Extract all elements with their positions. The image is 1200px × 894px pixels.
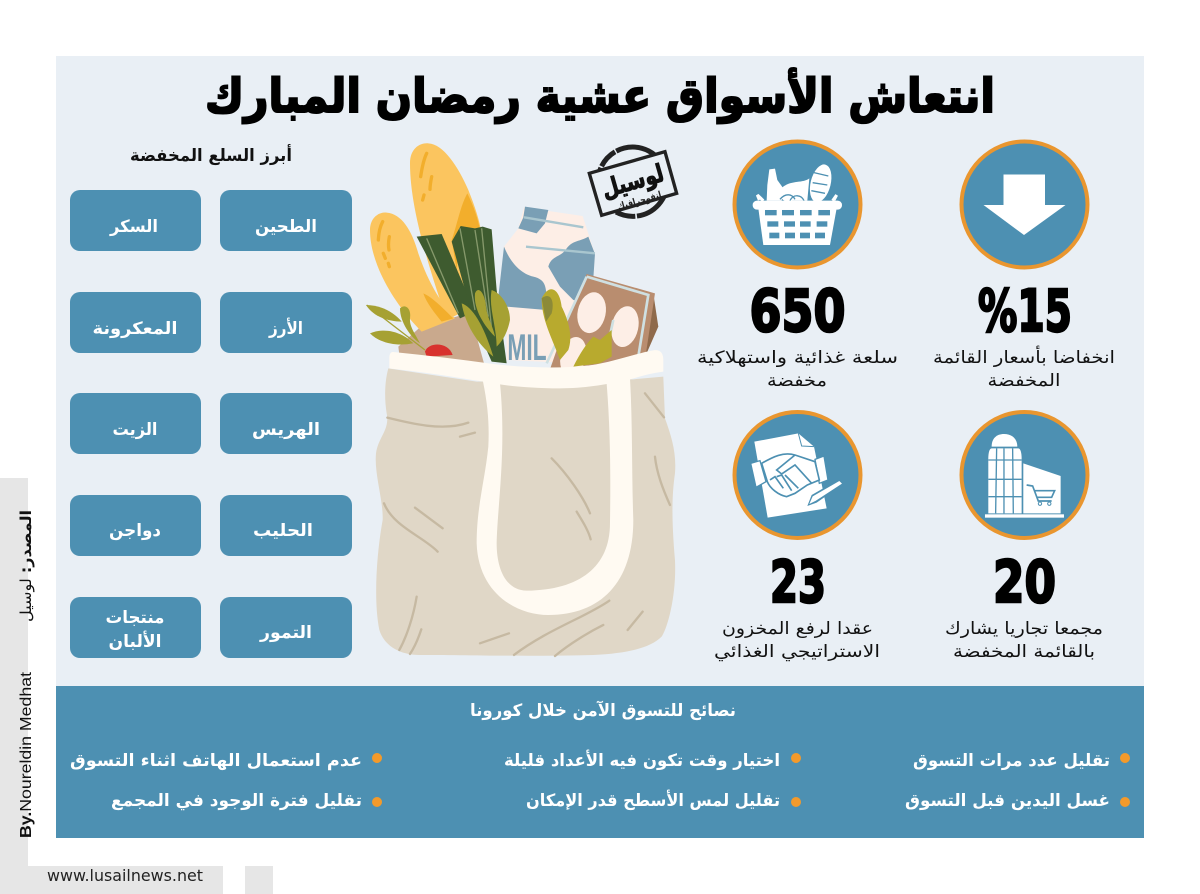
lettuce leaves — [542, 289, 612, 367]
label: price drop — [933, 345, 1115, 391]
icon: mall building — [962, 412, 1088, 538]
number: 23: 23 — [770, 548, 826, 616]
button: dates — [220, 597, 352, 658]
herbs left — [366, 305, 425, 350]
label: malls: مجمعا تجاريا يشارك — [945, 619, 1103, 639]
bag rim — [389, 350, 663, 388]
tote bag body — [376, 368, 675, 656]
bag creases — [384, 393, 670, 656]
icon: handshake contract — [734, 412, 860, 538]
label: goods: سلعة غذائية واستهلاكية — [697, 348, 898, 368]
button: harees — [220, 393, 352, 454]
stamp logo: إنفوجرافيك — [617, 190, 663, 213]
heading: goods: أبرز السلع المخفضة — [130, 144, 292, 166]
tip: avoid surfaces: تقليل لمس الأسطح قدر الإمكان — [526, 790, 780, 811]
number: 20: 20 — [993, 548, 1056, 616]
author credit: By.Noureldin Medhat — [18, 671, 35, 838]
button: rice: الأرز — [268, 318, 303, 339]
website: www.lusailnews.net — [47, 866, 203, 885]
button: milk — [220, 495, 352, 556]
label: price drop: المخفضة — [988, 371, 1060, 391]
button: poultry — [70, 495, 201, 556]
icon: basket — [734, 142, 860, 268]
footer block — [245, 866, 273, 894]
main panel background — [56, 56, 1144, 686]
number: 650: 650 — [750, 277, 846, 345]
stamp logo — [589, 147, 677, 216]
tip: short stay: تقليل فترة الوجود في المجمع — [111, 791, 362, 811]
tip: wash hands: غسل اليدين قبل التسوق — [905, 791, 1110, 811]
footer strip: website background — [28, 866, 223, 894]
button: oil: الزيت — [112, 420, 158, 440]
stat: contracts — [714, 412, 880, 662]
label: goods: مخفضة — [767, 371, 827, 391]
tip: no phone: عدم استعمال الهاتف اثناء التسوق — [70, 751, 362, 771]
button: sugar — [70, 190, 201, 251]
button: flour: الطحين — [255, 217, 317, 237]
button: milk: الحليب — [253, 521, 313, 541]
label: malls — [945, 619, 1103, 662]
baguette front — [370, 213, 455, 332]
tip: fewer trips: تقليل عدد مرات التسوق — [913, 751, 1110, 771]
button: poultry: دواجن — [109, 521, 161, 541]
paper bag — [398, 313, 484, 363]
button: dairy: منتجات — [106, 608, 164, 628]
button: harees: الهريس — [252, 420, 320, 440]
button: pasta — [70, 292, 201, 353]
tip: quiet time: اختيار وقت تكون فيه الأعداد قليلة — [504, 750, 780, 771]
button: pasta: المعكرونة — [92, 319, 178, 339]
bag strap — [477, 378, 633, 615]
panel: safe shopping tips — [56, 686, 1144, 838]
stat: malls — [945, 412, 1103, 662]
button: dairy: الألبان — [108, 631, 162, 652]
label: goods — [697, 348, 898, 391]
stamp logo: لوسيل — [598, 158, 667, 205]
heading: tips: نصائح للتسوق الآمن خلال كورونا — [470, 700, 736, 721]
stat: goods count — [697, 142, 898, 391]
illustration: groceries in bag — [366, 143, 677, 656]
label: price drop: انخفاضا بأسعار القائمة — [933, 345, 1115, 368]
egg box — [547, 274, 658, 379]
milk carton — [498, 207, 595, 368]
button: oil — [70, 393, 201, 454]
side strip: credits background — [0, 478, 28, 894]
number: 15 percent: %15 — [978, 277, 1072, 345]
button: sugar: السكر — [109, 217, 158, 237]
panel: most discounted goods — [70, 144, 352, 658]
title: انتعاش الأسواق عشية رمضان المبارك — [205, 67, 995, 124]
button: rice — [220, 292, 352, 353]
icon: down arrow — [962, 142, 1088, 268]
stat: price drop — [933, 142, 1115, 391]
baguette rear — [410, 143, 493, 320]
button: dates: التمور — [259, 623, 312, 643]
button: flour — [220, 190, 352, 251]
label: contracts: عقدا لرفع المخزون — [722, 619, 873, 639]
milk label: MIL — [507, 326, 547, 368]
herbs right — [462, 290, 510, 357]
button: dairy — [70, 597, 201, 658]
label: contracts: الاستراتيجي الغذائي — [714, 642, 880, 662]
source credit: المصدر: لوسيل — [17, 510, 35, 622]
label: contracts — [714, 619, 880, 662]
label: malls: بالقائمة المخفضة — [953, 642, 1095, 662]
leeks — [417, 226, 507, 363]
tomato — [425, 345, 453, 357]
